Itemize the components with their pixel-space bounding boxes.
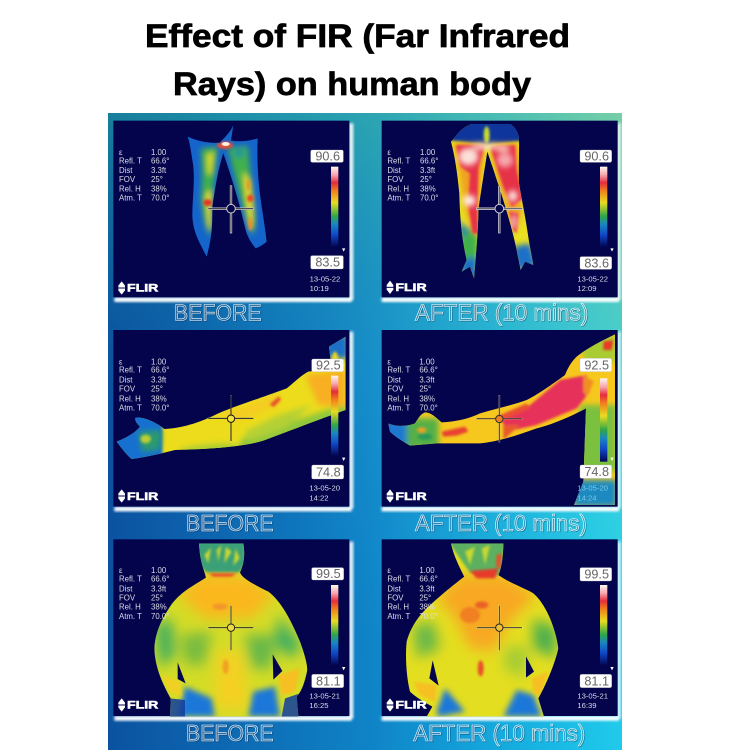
FLIR logo: FLIR <box>127 491 158 503</box>
panel: back before <box>113 539 353 746</box>
camera settings: Refl. T <box>387 156 410 165</box>
camera settings: 25° <box>151 175 163 184</box>
camera settings: 1.00 <box>419 566 435 575</box>
camera settings: 25° <box>419 385 431 394</box>
panel: legs after <box>382 121 621 326</box>
crosshair <box>476 395 523 442</box>
camera settings: Refl. T <box>119 156 142 165</box>
camera settings: 66.6° <box>151 156 169 165</box>
temperature scale: 83.5 <box>315 256 340 270</box>
timestamp: 13-05-21 <box>577 691 608 700</box>
camera settings: 3.3ft <box>420 166 436 175</box>
temperature scale <box>580 358 614 479</box>
crosshair <box>476 605 523 651</box>
timestamp: 16:39 <box>577 701 597 710</box>
camera settings: 1.00 <box>419 357 435 366</box>
camera settings: 66.6° <box>420 156 438 165</box>
FLIR logo <box>118 281 158 295</box>
FLIR logo <box>118 489 158 503</box>
camera settings: ε <box>387 148 391 157</box>
title <box>145 18 570 102</box>
temperature scale: 92.5 <box>584 358 609 372</box>
panel: legs before <box>113 121 353 326</box>
label: after: AFTER (10 mins) <box>415 510 587 536</box>
camera settings: 25° <box>420 175 432 184</box>
gradient background panel <box>108 113 622 750</box>
timestamp: 13-05-22 <box>310 275 340 284</box>
camera settings: Dist <box>387 585 402 594</box>
temperature scale: 74.8 <box>316 466 341 480</box>
camera settings: 1.00 <box>151 566 167 575</box>
temperature scale: 74.8 <box>584 465 609 479</box>
camera settings: 70.0° <box>419 612 438 621</box>
temperature scale: 92.5 <box>316 359 341 373</box>
camera settings: FOV <box>119 385 136 394</box>
camera settings: Refl. T <box>119 575 142 584</box>
crosshair <box>208 185 254 233</box>
camera settings: FOV <box>119 593 136 602</box>
temperature scale: 81.1 <box>316 674 341 688</box>
camera settings: 1.00 <box>151 357 167 366</box>
title: Effect of FIR (Far Infrared <box>145 18 570 54</box>
camera settings: 66.6° <box>419 366 438 375</box>
camera settings: 3.3ft <box>151 375 167 384</box>
label: before: BEFORE <box>186 510 274 536</box>
camera settings: Atm. T <box>387 194 410 203</box>
camera settings: 66.6° <box>151 366 169 375</box>
crosshair <box>476 186 523 233</box>
timestamp: 13-05-22 <box>577 275 608 284</box>
FLIR logo: FLIR <box>127 700 158 712</box>
camera settings: 3.3ft <box>419 585 435 594</box>
camera settings: FOV <box>387 593 404 602</box>
camera settings: 3.3ft <box>151 166 167 175</box>
temperature scale: 90.6 <box>315 149 340 163</box>
camera settings: FOV <box>119 175 136 184</box>
camera settings: FOV <box>387 175 404 184</box>
timestamp: 10:19 <box>310 284 329 293</box>
FLIR logo <box>386 281 427 294</box>
camera settings: Rel. H <box>119 185 141 194</box>
camera settings: Dist <box>387 375 402 384</box>
camera settings: 1.00 <box>420 148 436 157</box>
temperature scale: 99.5 <box>584 568 609 582</box>
timestamp: 14:24 <box>577 493 597 502</box>
camera settings: Dist <box>119 166 133 175</box>
camera settings: 66.6° <box>151 575 169 584</box>
FLIR logo: FLIR <box>395 491 427 503</box>
camera settings: Atm. T <box>119 612 142 621</box>
camera settings: Dist <box>387 166 402 175</box>
camera settings: 70.0° <box>151 612 169 621</box>
timestamp: 16:25 <box>309 701 329 710</box>
camera settings: ε <box>119 148 123 157</box>
timestamp: 13-05-20 <box>309 484 340 493</box>
temperature scale: 81.1 <box>584 674 609 688</box>
camera settings: Rel. H <box>119 394 141 403</box>
camera settings: 38% <box>151 185 167 194</box>
camera settings: ε <box>119 357 123 366</box>
timestamp: 14:22 <box>309 493 329 502</box>
camera settings: 1.00 <box>151 148 167 157</box>
camera settings: ε <box>119 566 123 575</box>
label: before: BEFORE <box>174 300 262 326</box>
thermal image: legs <box>450 122 537 280</box>
temperature scale <box>580 568 614 688</box>
camera settings: Atm. T <box>119 194 142 203</box>
camera settings: 70.0° <box>151 194 169 203</box>
temperature scale <box>311 149 345 270</box>
camera settings: 38% <box>151 603 167 612</box>
camera settings: Rel. H <box>119 603 141 612</box>
panel: back after <box>382 539 621 746</box>
camera settings: 70.0° <box>420 194 438 203</box>
FLIR logo <box>118 698 158 712</box>
camera settings: Rel. H <box>387 394 409 403</box>
camera settings: 25° <box>419 593 431 602</box>
panel: arm before <box>112 330 353 536</box>
camera settings: 70.0° <box>419 404 438 413</box>
panel: arm after <box>382 330 621 536</box>
FLIR logo: FLIR <box>395 700 427 712</box>
camera settings: Dist <box>119 585 133 594</box>
temperature scale: 99.5 <box>316 567 341 581</box>
label: after: AFTER (10 mins) <box>415 300 588 326</box>
camera settings: 25° <box>151 593 163 602</box>
camera settings: 66.6° <box>419 575 438 584</box>
camera settings: Rel. H <box>387 185 409 194</box>
camera settings: 38% <box>419 603 435 612</box>
camera settings: Refl. T <box>119 366 142 375</box>
thermal image: arm <box>112 335 348 462</box>
timestamp: 13-05-20 <box>577 484 608 493</box>
thermal image: arm and torso <box>383 332 617 508</box>
camera settings: 70.0° <box>151 404 169 413</box>
FLIR logo: FLIR <box>127 283 158 295</box>
temperature scale <box>580 149 614 270</box>
thermal image: back <box>152 542 312 718</box>
FLIR logo <box>386 489 427 503</box>
camera settings: Rel. H <box>387 603 409 612</box>
camera settings: 3.3ft <box>419 375 435 384</box>
timestamp: 12:09 <box>577 284 597 293</box>
timestamp: 13-05-21 <box>309 691 340 700</box>
label: after: AFTER (10 mins) <box>413 720 585 746</box>
camera settings: Refl. T <box>387 575 410 584</box>
thermal image: legs <box>185 123 268 260</box>
title: Rays) on human body <box>173 66 531 102</box>
camera settings: 38% <box>419 394 435 403</box>
temperature scale: 83.6 <box>584 256 609 270</box>
camera settings: Atm. T <box>387 404 410 413</box>
camera settings: 3.3ft <box>151 585 167 594</box>
temperature scale <box>312 359 345 480</box>
crosshair <box>208 395 254 442</box>
camera settings: ε <box>387 566 391 575</box>
camera settings: ε <box>387 357 391 366</box>
camera settings: FOV <box>387 385 404 394</box>
label: before: BEFORE <box>186 720 274 746</box>
camera settings: 38% <box>151 394 167 403</box>
camera settings: Refl. T <box>387 366 410 375</box>
temperature scale: 90.6 <box>584 149 609 163</box>
temperature scale <box>312 567 345 688</box>
camera settings: 25° <box>151 385 163 394</box>
thermal image: back <box>403 542 563 718</box>
camera settings: Atm. T <box>119 404 142 413</box>
camera settings: Atm. T <box>387 612 410 621</box>
camera settings: Dist <box>119 375 133 384</box>
FLIR logo: FLIR <box>395 282 427 294</box>
crosshair <box>208 605 254 651</box>
camera settings: 38% <box>420 185 436 194</box>
FLIR logo <box>386 698 427 712</box>
